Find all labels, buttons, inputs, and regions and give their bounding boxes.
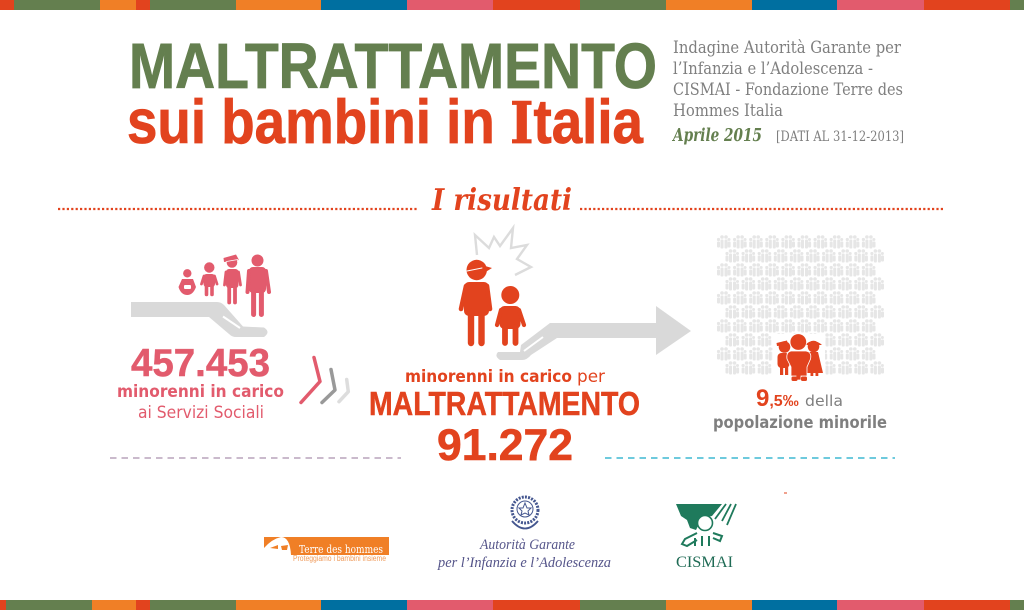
icon: grey population grid [717, 235, 884, 380]
statistic: 91.272 maltreatment: minorenni in carico [405, 367, 572, 386]
icon: red family [776, 334, 823, 381]
statistic: 9,5 per mille: popolazione minorile [713, 413, 887, 432]
icon: child [497, 286, 524, 343]
statistic: 9,5 per mille [713, 385, 887, 432]
logo: CISMAI [676, 504, 736, 571]
icon: child [202, 262, 217, 294]
bottom colour band [0, 600, 1024, 610]
statistic: 457.453 minors: 457.453 [131, 342, 270, 385]
top colour band [0, 0, 1024, 10]
icon: burst [475, 228, 531, 275]
title: MALTRATTAMENTO [129, 30, 657, 102]
survey source text: Hommes Italia [673, 101, 783, 120]
survey source text: [DATI AL 31-12-2013] [776, 129, 904, 145]
title: sui bambini in Italia [127, 88, 643, 157]
logo: CISMAI: CISMAI [676, 554, 733, 571]
statistic: 457.453 minors [117, 342, 284, 422]
survey source text [671, 38, 904, 146]
icon: adult [787, 334, 811, 381]
icon: man with cap [461, 260, 492, 343]
statistic: 9,5 per mille: 9,5‰ [756, 385, 799, 412]
statistic: 91.272 maltreatment: 91.272 [437, 421, 573, 470]
statistic: 9,5 per mille: della [805, 392, 843, 410]
logo: Autorità Garante: Autorità Garante [479, 537, 575, 553]
icon: adult [248, 254, 269, 314]
icon: boy [776, 340, 790, 375]
icon: republic emblem [512, 497, 538, 528]
survey source text: Aprile 2015 [671, 126, 762, 146]
icon: family of four [178, 254, 269, 314]
title [127, 30, 657, 157]
survey source text: Indagine Autorità Garante per [673, 38, 901, 57]
section heading: I risultati: I risultati [431, 183, 572, 218]
logo: Terre des hommes: Proteggiamo i bambini insieme [293, 554, 386, 563]
arrow: chevrons [301, 358, 348, 402]
survey source text: CISMAI - Fondazione Terre des [673, 80, 903, 99]
logo: Autorità Garante [437, 497, 611, 571]
icon: girl [805, 341, 823, 376]
icon: teenager with cap [224, 254, 240, 302]
icon: man and child [461, 260, 524, 343]
logo: Terre des hommes [264, 537, 389, 563]
statistic: 457.453 minors: minorenni in carico [117, 382, 284, 401]
statistic: 91.272 maltreatment [369, 367, 640, 470]
logo: Autorità Garante: per l’Infanzia e l’Adolescenza [437, 555, 611, 571]
icon: baby [178, 269, 196, 295]
logo: Terre des hommes: Terre des hommes [299, 543, 383, 556]
survey source text: l’Infanzia e l’Adolescenza - [673, 59, 873, 78]
arrow: hand with arrow [496, 306, 691, 360]
statistic: 457.453 minors: ai Servizi Sociali [138, 403, 264, 422]
icon: open hand left [131, 302, 268, 337]
statistic: 91.272 maltreatment: MALTRATTAMENTO [369, 385, 640, 422]
statistic: 91.272 maltreatment: per [577, 367, 605, 386]
